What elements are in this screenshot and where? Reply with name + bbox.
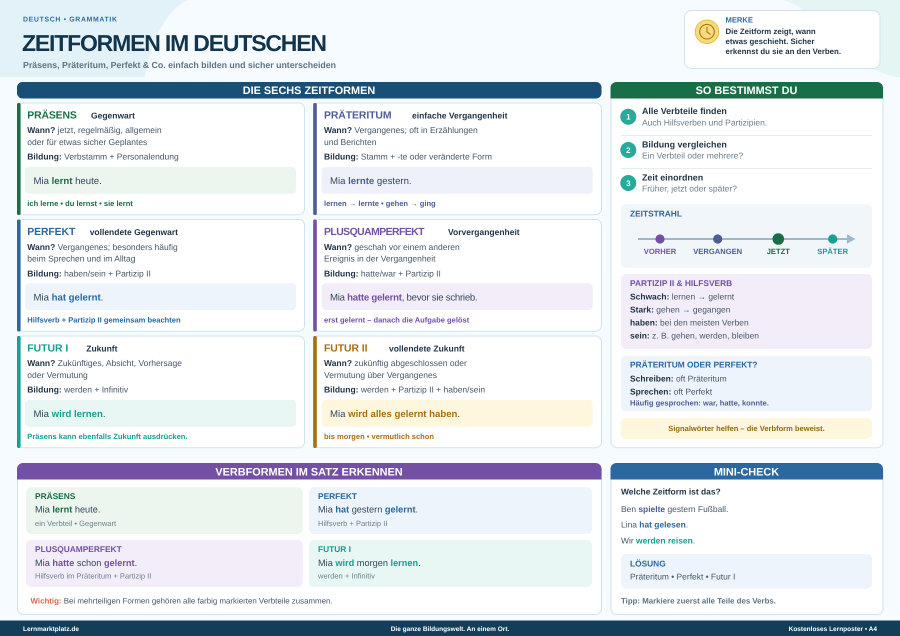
callout text: etwas geschieht. Sicher (726, 37, 814, 46)
card: Futur I: Zukünftiges, Absicht, Vorhersage (58, 358, 182, 368)
card: Perfekt: PERFEKT (27, 227, 76, 238)
example: Futur I: FUTUR I (318, 544, 351, 554)
callout text: erkennst du sie an den Verben. (726, 47, 841, 56)
panel: So bestimmst du: SO BESTIMMST DU (696, 85, 797, 97)
box: Partizip II: haben: bei den meisten Verben (630, 318, 749, 328)
footer: Lernmarktplatz.de (23, 626, 79, 633)
panel: Verbformen im Satz erkennen: VERBFORMEN IM SATZ ERKENNEN (215, 466, 403, 478)
example: Futur I: Mia wird morgen lernen. (318, 558, 421, 568)
box: Präteritum oder Perfekt: Sprechen: oft Perfekt (630, 386, 713, 396)
card: Präsens: Wann? (27, 125, 55, 135)
section header: die sechs Zeitformen (17, 82, 602, 98)
card: Präteritum (313, 103, 602, 215)
card: Perfekt: vollendete Gegenwart (90, 227, 178, 237)
card: Futur I: Präsens kann ebenfalls Zukunft ausdrücken. (27, 432, 188, 441)
card: Plusquamperfekt: Wann? (324, 242, 352, 252)
card: Futur II: FUTUR II (324, 344, 368, 355)
card: Präteritum: PRÄTERITUM (324, 110, 392, 122)
step 3: 3 (626, 179, 631, 188)
box: Präteritum oder Perfekt: Häufig gesprochen: war, hatte, konnte. (630, 399, 769, 408)
step 3: Zeit einordnen (642, 172, 703, 182)
box: Partizip II: Schwach: lernen → gelernt (630, 292, 735, 302)
card: Plusquamperfekt (313, 220, 602, 332)
sentences (621, 504, 728, 545)
step 1 (620, 106, 767, 128)
example: Plusquamperfekt: Hilfsverb im Präteritum + Partizip II (35, 572, 151, 581)
callout: Merke (684, 10, 880, 68)
header: title block (22, 16, 336, 70)
title: ZEITFORMEN IM DEUTSCHEN (22, 30, 327, 56)
example: Präsens: Mia lernt heute. (35, 505, 100, 515)
box: Partizip II: Stark: gehen → gegangen (630, 304, 731, 314)
tip: Tipp: Markiere zuerst alle Teile des Verbs. (621, 597, 776, 606)
example: Plusquamperfekt: Mia hatte schon gelernt. (35, 558, 137, 568)
step 2 (620, 140, 743, 161)
example: Perfekt: Hilfsverb + Partizip II (318, 519, 387, 528)
callout heading: MERKE (726, 16, 753, 24)
card: Futur I: Wann? (27, 358, 55, 368)
footer: Kostenloses Lernposter • A4 (789, 626, 877, 633)
box: Signalwörter: Signalwörter helfen – die Verbform beweist. (668, 424, 825, 433)
card: Plusquamperfekt: erst gelernt – danach die Aufgabe gelöst (324, 316, 470, 325)
card: Präteritum: Vergangenes; oft in Erzählungen (354, 125, 478, 135)
example: Perfekt: Mia hat gestern gelernt. (318, 505, 418, 515)
card: Präteritum: einfache Vergangenheit (412, 110, 508, 120)
card: Futur I: Zukunft (86, 344, 118, 354)
step 2: Bildung vergleichen (642, 140, 727, 150)
example: Präsens: ein Verbteil • Gegenwart (35, 519, 117, 528)
card: Futur I: Mia wird lernen. (34, 409, 105, 420)
sentences: Wir werden reisen. (621, 535, 695, 545)
card: Präsens: Mia lernt heute. (34, 176, 102, 187)
solution: Präteritum • Perfekt • Futur I (630, 572, 735, 582)
card: Präsens: Bildung: Verbstamm + Personalendung (27, 152, 179, 162)
sentences: Lina hat gelesen. (621, 520, 688, 530)
question: Welche Zeitform ist das? (621, 486, 721, 496)
step 2: 2 (626, 146, 631, 155)
card: Plusquamperfekt: Mia hatte gelernt, bevor sie schrieb. (330, 292, 478, 304)
example: Perfekt: PERFEKT (318, 491, 357, 501)
box: Partizip II (621, 274, 872, 349)
step 3: Früher, jetzt oder später? (642, 184, 737, 194)
example: Futur I (309, 540, 592, 587)
card: Futur II: zukünftig abgeschlossen oder (354, 358, 467, 368)
example: Präsens (26, 487, 303, 534)
box: Präteritum oder Perfekt: Schreiben: oft Präteritum (630, 373, 727, 383)
card: Futur II (313, 336, 602, 448)
timeline: JETZT (767, 247, 790, 256)
card: Präsens: PRÄSENS (27, 110, 77, 122)
card: Futur II: bis morgen • vermutlich schon (324, 432, 434, 441)
section header: die sechs Zeitformen: DIE SECHS ZEITFORMEN (243, 85, 375, 97)
sentences: Ben spielte gestern Fußball. (621, 504, 728, 514)
card: Futur I: oder Vermutung (27, 370, 88, 380)
footer: Die ganze Bildungswelt. An einem Ort. (391, 626, 509, 633)
panel: Mini-Check: MINI-CHECK (714, 466, 779, 478)
card: Perfekt: beim Sprechen und im Alltag (27, 254, 136, 264)
step 2: Ein Verbteil oder mehrere? (642, 151, 743, 161)
card: Präsens: Gegenwart (91, 110, 135, 120)
box: Präteritum oder Perfekt (621, 356, 872, 411)
card: Präteritum: Mia lernte gestern. (330, 176, 412, 187)
card: Plusquamperfekt: Bildung: hatte/war + Partizip II (324, 268, 441, 278)
example: Futur I: werden + Infinitiv (317, 572, 375, 581)
step 1: 1 (626, 113, 631, 122)
card: Präteritum: und Berichten (324, 137, 377, 147)
panel: So bestimmst du (610, 82, 883, 448)
card: Präteritum: lernen → lernte • gehen → ging (324, 199, 436, 208)
timeline: ZEITSTRAHL (630, 208, 682, 218)
card: Präsens (17, 103, 304, 215)
timeline: VORHER (644, 247, 677, 256)
step 1: Auch Hilfsverben und Partizipien. (642, 118, 767, 128)
card: Futur II: Wann? (324, 358, 352, 368)
footer (0, 620, 900, 636)
box: Präteritum oder Perfekt: PRÄTERITUM ODER PERFEKT? (630, 360, 757, 370)
timeline: VERGANGEN (693, 247, 742, 256)
card: Plusquamperfekt: PLUSQUAMPERFEKT (324, 227, 425, 238)
note: Wichtig: Wichtig: Bei mehrteiligen Formen gehören alle farbig markierten Verbteile zusammen. (30, 597, 333, 606)
example: Perfekt (309, 487, 592, 534)
card: Plusquamperfekt: geschah vor einem anderen (354, 242, 460, 252)
step 1: Alle Verbteile finden (642, 106, 727, 116)
card: Präsens: jetzt, regelmäßig, allgemein (58, 125, 162, 135)
timeline: SPÄTER (817, 247, 849, 256)
icon: clock (695, 20, 719, 43)
card: Präteritum: Wann? (324, 125, 352, 135)
card: Perfekt: Bildung: haben/sein + Partizip II (27, 268, 151, 278)
card: Perfekt: Wann? (27, 242, 55, 252)
panel: Verbformen im Satz erkennen (17, 463, 602, 614)
card: Präsens: ich lerne • du lernst • sie lernt (27, 199, 133, 208)
solution (621, 554, 872, 589)
solution: LÖSUNG (630, 559, 666, 569)
card: Präteritum: Bildung: Stamm + -te oder veränderte Form (324, 152, 492, 162)
eyebrow: DEUTSCH • GRAMMATIK (23, 16, 117, 24)
example: Plusquamperfekt (26, 540, 303, 587)
card: Futur II: Vermutung über Vergangenes (324, 370, 437, 380)
timeline (621, 204, 872, 268)
card: Futur II: Bildung: werden + Partizip II + haben/sein (324, 385, 485, 395)
example: Präsens: PRÄSENS (35, 491, 76, 501)
card: Futur I (17, 336, 304, 448)
step 3 (620, 172, 737, 194)
callout text: Die Zeitform zeigt, wann (726, 27, 816, 36)
box: Partizip II: sein: z. B. gehen, werden, bleiben (630, 330, 759, 340)
card: Präsens: oder für etwas sicher Geplantes (27, 137, 147, 147)
card: Futur II: vollendete Zukunft (389, 344, 465, 354)
card: Perfekt (17, 220, 304, 332)
panel: Mini-Check (610, 463, 883, 614)
card: Futur I: FUTUR I (27, 344, 68, 355)
card: Perfekt: Hilfsverb + Partizip II gemeinsam beachten (27, 316, 181, 325)
card: Perfekt: Vergangenes; besonders häufig (58, 242, 178, 252)
card: Futur I: Bildung: werden + Infinitiv (27, 385, 129, 395)
card: Plusquamperfekt: Ereignis in der Vergangenheit (324, 254, 436, 264)
card: Plusquamperfekt: Vorvergangenheit (448, 227, 520, 237)
box: Partizip II: PARTIZIP II & HILFSVERB (630, 278, 732, 288)
example: Plusquamperfekt: PLUSQUAMPERFEKT (35, 544, 122, 554)
card: Futur II: Mia wird alles gelernt haben. (330, 409, 460, 420)
card: Perfekt: Mia hat gelernt. (34, 292, 103, 304)
subtitle: Präsens, Präteritum, Perfekt & Co. einfach bilden und sicher unterscheiden (23, 60, 336, 70)
box: Signalwörter (621, 418, 872, 439)
